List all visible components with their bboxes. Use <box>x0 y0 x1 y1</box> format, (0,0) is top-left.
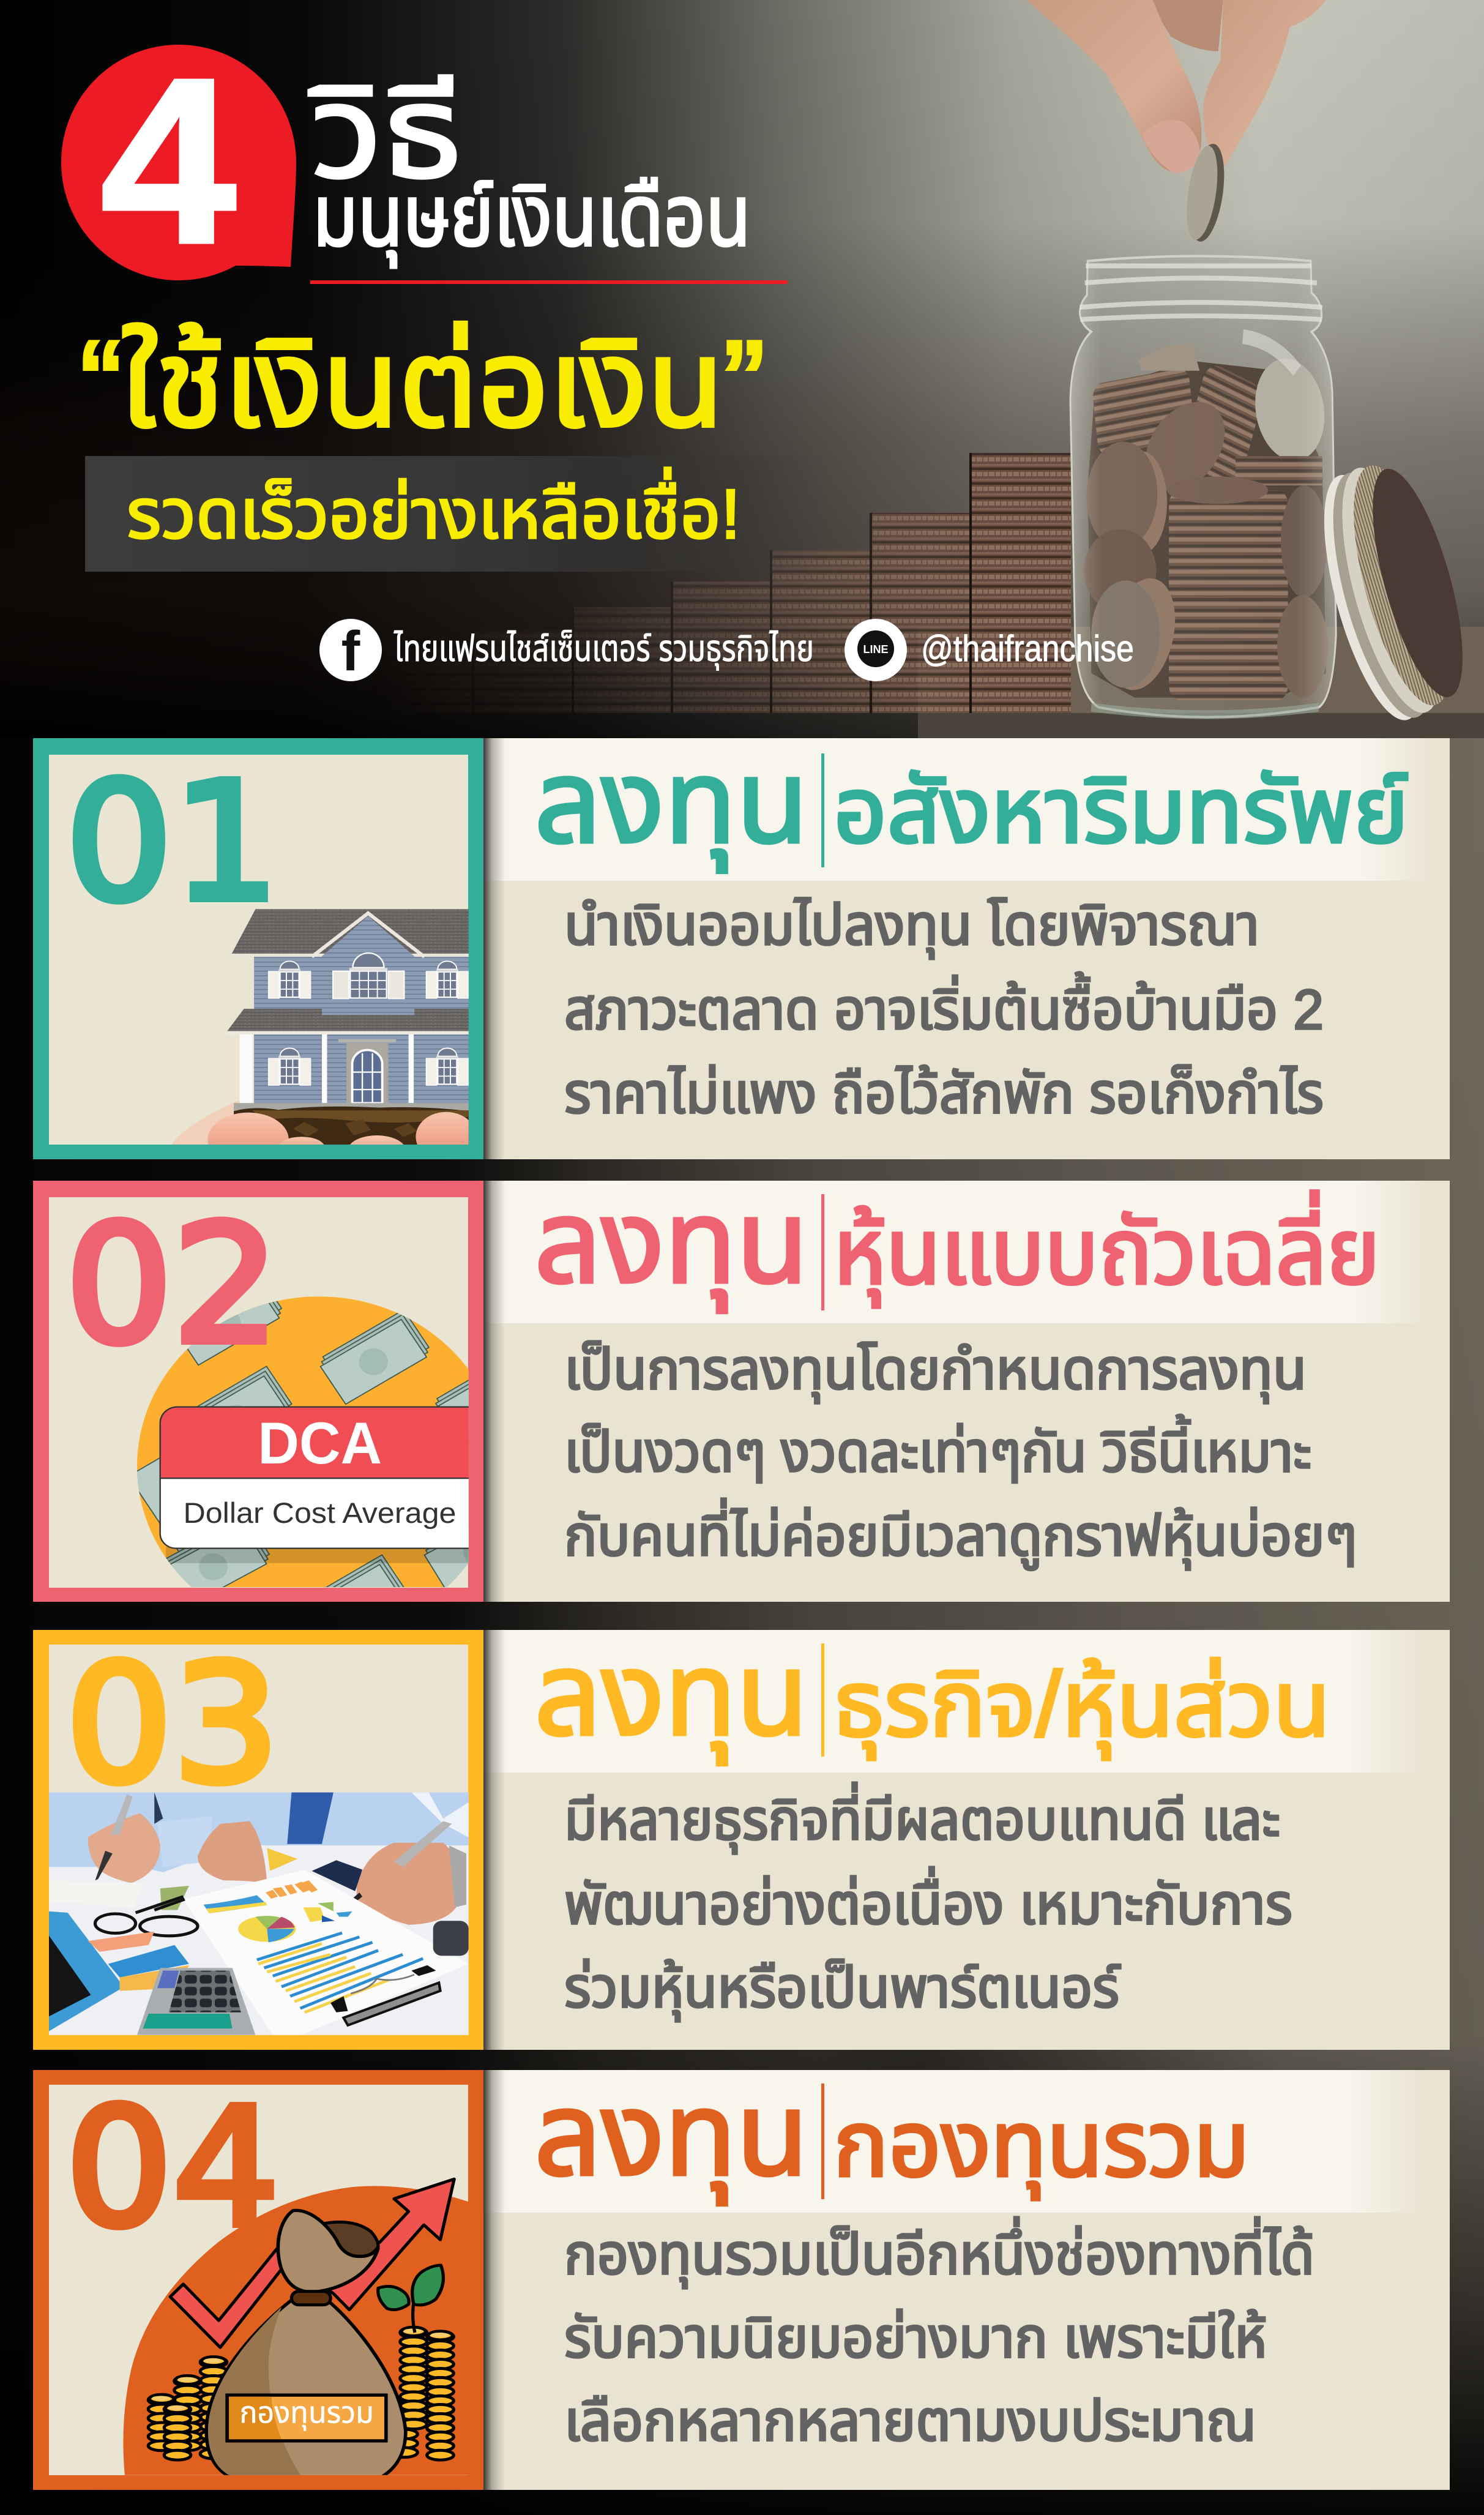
bag label <box>227 2395 386 2441</box>
DCA card: Dollar Cost Average <box>183 1497 456 1529</box>
speech bubble <box>61 45 296 280</box>
money bag <box>206 2210 406 2478</box>
heading band <box>483 1181 1429 1323</box>
heading: ธุรกิจ/หุ้นส่วน <box>833 1653 1330 1760</box>
title <box>309 61 788 284</box>
social contacts <box>319 619 1134 682</box>
number frame <box>33 1629 483 2050</box>
main headline in yellow: “ใช้เงินต่อเงิน” <box>80 316 765 452</box>
body text: เป็นงวดๆ งวดละเท่าๆกัน วิธีนี้เหมาะ <box>564 1414 1311 1484</box>
body text <box>564 1339 1357 1570</box>
calculator <box>137 1968 255 2035</box>
subheadline text: รวดเร็วอย่างเหลือเชื่อ! <box>127 467 740 553</box>
body text: รับความนิยมอย่างมาก เพราะมีให้ <box>564 2307 1267 2369</box>
coin stacks <box>148 2327 453 2460</box>
icon: facebook: f <box>341 620 360 682</box>
heading: ลงทุน <box>534 2070 808 2205</box>
DCA card: DCA <box>258 1410 382 1476</box>
number 03: 03 <box>65 1629 280 1819</box>
facebook page name: ไทยแฟรนไชส์เซ็นเตอร์ รวมธุรกิจไทย <box>393 628 814 671</box>
heading: กองทุนรวม <box>833 2093 1250 2200</box>
DCA card <box>160 1407 472 1549</box>
report paper with charts <box>183 1870 469 2035</box>
bag label: กองทุนรวม <box>239 2396 374 2431</box>
icon: house on hand <box>172 909 477 1167</box>
heading band <box>483 2070 1423 2213</box>
dark fading box <box>85 456 832 572</box>
orange backdrop <box>123 2186 469 2476</box>
body text: กองทุนรวมเป็นอีกหนึ่งช่องทางที่ได้ <box>564 2217 1314 2289</box>
phone and notebook <box>311 1860 362 1891</box>
line handle: @thaifranchise <box>921 628 1134 669</box>
icon: line <box>845 619 907 681</box>
heading band <box>483 738 1435 881</box>
glasses <box>95 1897 198 1936</box>
body text: ราคาไม่แพง ถือไว้สักพัก รอเก็งกำไร <box>564 1063 1324 1125</box>
coin stacks <box>466 453 1071 713</box>
heading <box>534 2070 1250 2205</box>
sprout <box>378 2265 443 2333</box>
panel background <box>483 1630 1450 2050</box>
body text <box>564 2217 1314 2453</box>
number 04: 04 <box>65 2073 280 2263</box>
heading <box>534 738 1409 873</box>
business desk photo illustration <box>49 1792 469 2035</box>
number frame <box>33 738 483 1167</box>
red underline <box>310 280 788 284</box>
body text: พัฒนาอย่างต่อเนื่อง เหมาะกับการ <box>564 1867 1292 1936</box>
number frame <box>33 2070 483 2490</box>
photo backdrop <box>0 0 1484 738</box>
body text: กับคนที่ไม่ค่อยมีเวลาดูกราฟหุ้นบ่อยๆ <box>564 1498 1357 1570</box>
heading: อสังหาริมทรัพย์ <box>833 759 1409 862</box>
falling coin <box>1181 140 1230 246</box>
heading: ลงทุน <box>534 1178 808 1313</box>
glass jar <box>1070 256 1336 717</box>
hero photo: hand dropping coin into jar <box>0 0 1484 738</box>
body text <box>564 894 1324 1125</box>
hand <box>1026 0 1326 173</box>
body text: มีหลายธุรกิจที่มีผลตอบแทนดี และ <box>564 1782 1280 1854</box>
body text: เป็นการลงทุนโดยกำหนดการลงทุน <box>564 1339 1307 1403</box>
clipboard clip <box>330 1965 441 2025</box>
number 02: 02 <box>65 1190 280 1380</box>
panel 2: dollar cost average <box>33 1178 1450 1650</box>
heading: หุ้นแบบถัวเฉลี่ย <box>833 1190 1380 1307</box>
body text: สภาวะตลาด อาจเริ่มต้นซื้อบ้านมือ 2 <box>564 972 1324 1041</box>
icon: money bag with arrow <box>123 2179 469 2478</box>
heading: ลงทุน <box>534 1630 808 1765</box>
heading band <box>483 1630 1423 1773</box>
subheadline box <box>85 456 832 572</box>
panel 3: business partnership <box>33 1629 1450 2050</box>
panel 1: real estate <box>33 738 1450 1167</box>
logo badge with number 4 <box>61 29 296 293</box>
icon: facebook <box>319 619 382 682</box>
panel background <box>483 738 1450 1159</box>
growth arrow <box>170 2179 454 2347</box>
body text: เลือกหลากหลายตามงบประมาณ <box>564 2390 1256 2453</box>
body text: ร่วมหุ้นหรือเป็นพาร์ตเนอร์ <box>564 1957 1120 2022</box>
panel 4: mutual funds <box>33 2070 1450 2490</box>
heading <box>534 1630 1330 1765</box>
jar coins <box>1081 342 1338 704</box>
title line: มนุษย์เงินเดือน: มนุษย์เงินเดือน <box>313 168 751 267</box>
number 01: 01 <box>65 747 280 937</box>
heading: ลงทุน <box>534 738 808 873</box>
body text: นำเงินออมไปลงทุน โดยพิจารณา <box>564 894 1259 959</box>
body text <box>564 1782 1292 2022</box>
icon: line: LINE <box>863 643 889 656</box>
jar lid <box>1304 449 1481 737</box>
number frame <box>33 1181 547 1650</box>
panel background <box>483 1181 1450 1602</box>
hands <box>88 1813 160 1883</box>
laptop <box>49 1911 120 2031</box>
panel background <box>483 2070 1450 2490</box>
heading <box>534 1178 1380 1313</box>
title line: วิธี: วิธี <box>309 61 462 204</box>
icon: DCA money circle <box>120 1271 547 1650</box>
number 4: 4 <box>100 29 238 293</box>
